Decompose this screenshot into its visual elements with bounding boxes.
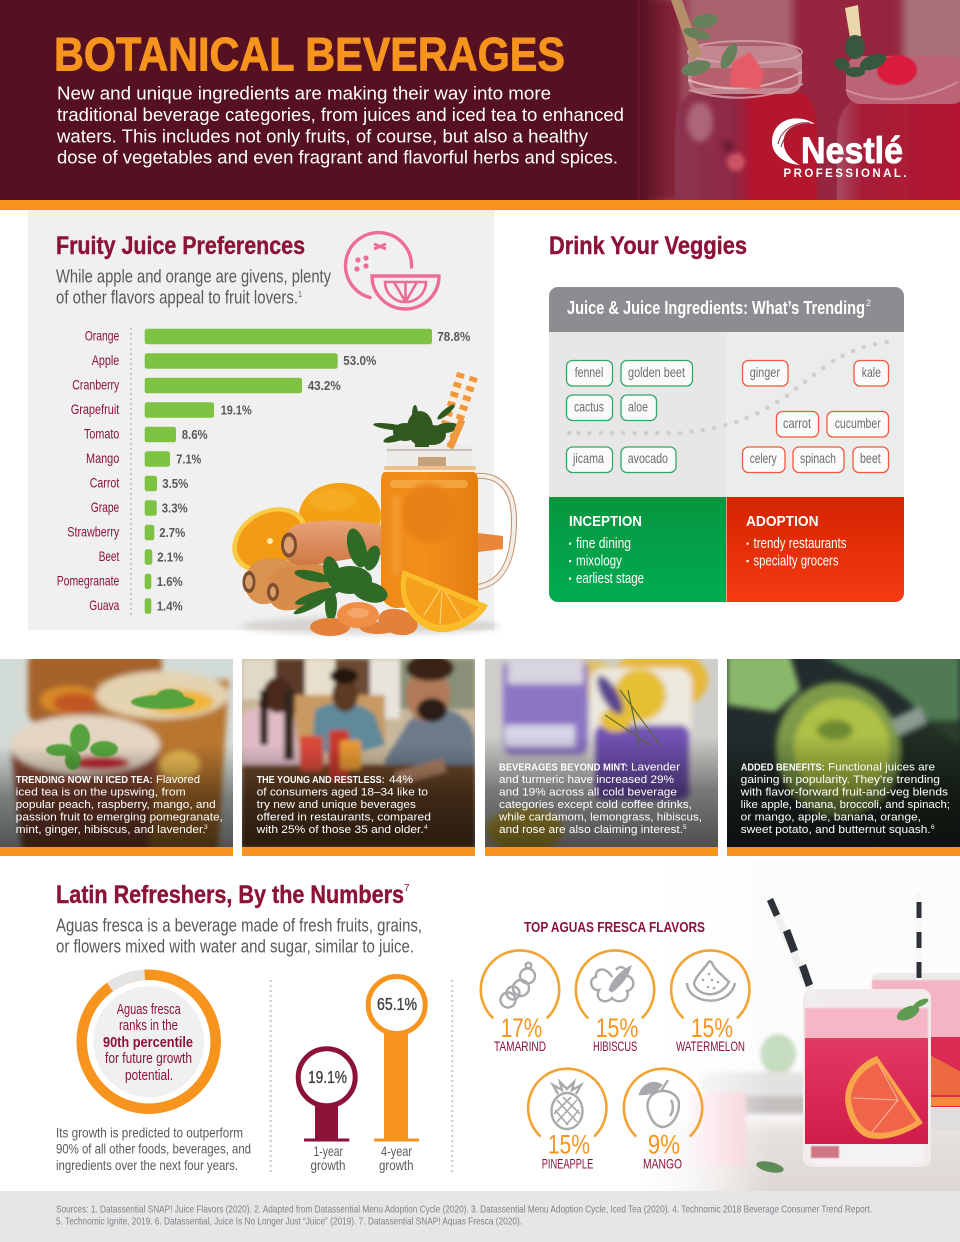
inception box: [549, 497, 726, 602]
photo: lavender drinks: [485, 648, 718, 852]
intro paragraph: traditional beverage categories, from juices and iced tea to enhanced: [57, 105, 624, 125]
lollipop: 1-year growth: [298, 1049, 355, 1173]
adoption tags: beet: [860, 450, 881, 466]
caption: added benefits: [740, 762, 950, 836]
caption: added benefits: gaining in popularity. They’re trending: [741, 774, 940, 786]
header photo: red drinks in jars: [640, 0, 960, 210]
caption: beverages beyond mint: and rose are also claiming interest.: [499, 824, 683, 836]
caption: young and restless: try new and unique beverages: [257, 799, 417, 811]
bar chart: Strawberry: [67, 524, 119, 540]
carrot slices: [310, 618, 350, 636]
orange band: [0, 847, 233, 856]
bar chart: Pomegranate: [57, 572, 119, 588]
caption: iced tea: passion fruit to emerging pomegranate,: [16, 812, 223, 824]
description: [56, 266, 332, 308]
bar chart: Beet: [99, 548, 119, 564]
flavor: pineapple: PINEAPPLE: [542, 1156, 593, 1172]
90th percentile ring: for future growth: [105, 1050, 192, 1067]
bar chart: 1.4%: [157, 600, 183, 614]
icon: pineapple: [552, 1082, 582, 1129]
caption: added benefits: or mango, apple, banana, orange,: [741, 812, 921, 824]
jar juice: [381, 472, 478, 608]
growth note: 90% of all other foods, beverages, and: [56, 1140, 251, 1156]
caption: young and restless: [256, 774, 431, 836]
bar chart: Carrot: [90, 474, 119, 490]
caption: young and restless: 4: [424, 824, 428, 831]
lollipop: 4-year growth: 4-year: [381, 1143, 412, 1159]
caption: young and restless: offered in restaurants, compared: [257, 812, 431, 824]
bar chart: [57, 328, 470, 616]
parsley on jar: [373, 403, 460, 447]
flavor: hibiscus: 15%: [596, 1013, 638, 1043]
orange band: [727, 847, 960, 856]
caption: iced tea: [16, 774, 223, 836]
description: While apple and orange are givens, plenty: [56, 266, 332, 286]
bar chart: Mango: [86, 450, 119, 466]
intro paragraph: waters. This includes not only fruits, of course, but also a healthy: [56, 126, 588, 146]
flavor: mango: [624, 1069, 702, 1172]
heading: latin refreshers: 7: [404, 883, 410, 894]
caption: beverages beyond mint: 5: [683, 824, 687, 831]
front straw: [766, 897, 814, 990]
bar chart: Grape: [91, 499, 119, 515]
back orange: [299, 483, 381, 525]
flavor: hibiscus: HIBISCUS: [593, 1038, 637, 1054]
inception tags: avocado: [628, 450, 668, 466]
parsley front: [292, 526, 390, 621]
description: [56, 914, 422, 956]
icon: tamarind: [500, 963, 535, 1008]
bar chart: Tomato: [84, 426, 119, 442]
logo: Nestlé Professional: [772, 118, 906, 180]
bar chart: 53.0%: [343, 354, 376, 368]
panel heading: 2: [866, 298, 871, 308]
inception tags: golden beet: [628, 364, 685, 380]
bar chart: 19.1%: [221, 404, 252, 418]
adoption tags: kale: [862, 364, 881, 380]
caption: added benefits: sweet potato, and butternut squash.: [741, 824, 931, 836]
flavor: tamarind: TAMARIND: [494, 1038, 546, 1054]
adoption tags: ginger: [750, 364, 780, 380]
inception tags: jicama: [572, 450, 604, 466]
flavor: mango: 9%: [648, 1130, 680, 1160]
flavor: watermelon: [671, 950, 750, 1054]
90th percentile ring: potential.: [125, 1067, 173, 1084]
lollipop: 1-year growth: 19.1%: [308, 1067, 347, 1087]
caption: young and restless: with 25% of those 35 and older.: [256, 824, 424, 836]
inception box: INCEPTION: [569, 513, 642, 530]
bar chart: 7.1%: [176, 452, 201, 466]
front straw tip: [450, 420, 462, 448]
icon: citrus fruit: [346, 233, 439, 309]
90th percentile ring: [82, 975, 216, 1109]
description: or flowers mixed with water and sugar, similar to juice.: [56, 936, 414, 956]
adoption box: trendy restaurants: [754, 536, 846, 552]
adoption box: specialty grocers: [754, 554, 838, 570]
panel heading: Juice & Juice Ingredients: What’s Trending: [567, 298, 865, 318]
heading: drink your veggies: Drink Your Veggies: [549, 232, 747, 260]
caption: beverages beyond mint: Lavender: [631, 762, 680, 774]
lollipop: 1-year growth: 1-year: [314, 1143, 343, 1159]
caption: iced tea: iced tea is on the upswing, from: [16, 786, 186, 798]
card: young and restless: [242, 655, 475, 856]
bar chart: 8.6%: [182, 428, 208, 442]
lollipop: 4-year growth: growth: [379, 1157, 414, 1173]
caption: iced tea: TRENDING NOW IN ICED TEA:: [16, 775, 153, 786]
bar chart: 3.5%: [162, 477, 188, 491]
flavor: pineapple: 15%: [548, 1130, 590, 1160]
front glass: [803, 989, 931, 1167]
right jar: [837, 100, 960, 205]
bar chart: Guava: [89, 597, 119, 613]
card: added benefits: [727, 655, 960, 856]
caption: beverages beyond mint: and turmeric have increased 29%: [499, 774, 674, 786]
caption: iced tea: Flavored: [156, 774, 200, 786]
caption: added benefits: 6: [931, 824, 935, 831]
adoption tags: cucumber: [835, 415, 881, 431]
flavor: tamarind: 17%: [501, 1013, 542, 1043]
lollipop: 4-year growth: 65.1%: [377, 994, 417, 1014]
flavor: mango: MANGO: [643, 1156, 682, 1172]
footer: sources: 5. Technomic Ignite, 2019. 6. Datassential, Juice Is No Longer Just “Juice” (2019). 7. Datassential SNAP! Aquas Fresca (2020).: [56, 1216, 522, 1228]
orange wedge: [401, 570, 488, 632]
footer: sources: [0, 1191, 960, 1242]
bar chart: 2.1%: [157, 550, 183, 564]
adoption box: [726, 497, 904, 602]
flavor: pineapple: [528, 1069, 606, 1172]
caption: beverages beyond mint: and 19% across all cold beverage: [499, 786, 677, 798]
back glass: [872, 973, 960, 1130]
flavor: watermelon: WATERMELON: [676, 1038, 745, 1054]
heading: fruity juice: Fruity Juice Preferences: [56, 232, 305, 260]
growth note: Its growth is predicted to outperform: [56, 1124, 243, 1140]
intro paragraph: dose of vegetables and even fragrant and flavorful herbs and spices.: [57, 148, 618, 168]
caption: added benefits: with flavor-forward fruit-and-veg blends: [740, 786, 949, 798]
caption: added benefits: ADDED BENEFITS:: [741, 762, 825, 774]
adoption tags: carrot: [783, 415, 811, 431]
jar neck: [387, 445, 472, 467]
heading: top flavors: TOP AGUAS FRESCA FLAVORS: [524, 920, 705, 936]
card: beverages beyond mint: [485, 648, 718, 856]
lollipop: 1-year growth: growth: [310, 1157, 346, 1173]
orange band: [485, 847, 718, 856]
photo: juice jar with oranges and carrots: [220, 373, 520, 640]
description: Aguas fresca is a beverage made of fresh fruits, grains,: [56, 914, 422, 936]
bar chart: 3.3%: [162, 502, 188, 516]
adoption tags: spinach: [800, 450, 836, 466]
inception box: mixology: [576, 554, 623, 570]
logo: Nestlé Professional: Nestlé: [801, 130, 903, 171]
growth note: [56, 1124, 251, 1173]
flavor: watermelon: 15%: [691, 1013, 733, 1043]
caption: iced tea: mint, ginger, hibiscus, and lavender.: [16, 824, 206, 836]
caption: young and restless: of consumers aged 18–34 like to: [257, 786, 428, 798]
photo: iced tea: [0, 650, 233, 850]
straws and mint: [671, 0, 702, 60]
orange band: [0, 200, 960, 210]
inception tags: [566, 360, 692, 472]
intro paragraph: New and unique ingredients are making their way into more: [57, 84, 551, 104]
caption: beverages beyond mint: [498, 762, 702, 836]
description: 1: [298, 290, 302, 299]
inception box: earliest stage: [576, 571, 644, 587]
caption: added benefits: like apple, banana, broccoli, and spinach;: [741, 799, 950, 811]
orange band: [242, 847, 475, 856]
bar chart: 2.7%: [159, 526, 185, 540]
flavor: hibiscus: [576, 950, 654, 1054]
adoption tags: [742, 360, 888, 472]
caption: iced tea: popular peach, raspberry, mango, and: [16, 799, 216, 811]
straws: [444, 373, 474, 448]
bar chart: 78.8%: [437, 330, 470, 344]
logo: Nestlé Professional: PROFESSIONAL.: [784, 168, 906, 180]
half orange: [232, 507, 306, 570]
caption: beverages beyond mint: BEVERAGES BEYOND MINT:: [499, 762, 628, 774]
flavor: tamarind: [481, 950, 559, 1054]
lollipop: 4-year growth: [368, 976, 425, 1173]
inception tags: aloe: [628, 398, 648, 414]
caption: beverages beyond mint: while cardamom, lemongrass, hibiscus,: [498, 812, 702, 824]
intro paragraph: [56, 84, 624, 168]
inception box: fine dining: [576, 536, 631, 552]
adoption box: ADOPTION: [746, 513, 818, 530]
card: iced tea: [0, 650, 233, 856]
icon: watermelon: [687, 962, 735, 1001]
photo: green juice: [727, 655, 960, 847]
bar chart: 1.6%: [157, 575, 183, 589]
caption: young and restless: THE YOUNG AND RESTLESS:: [257, 775, 385, 786]
caption: beverages beyond mint: categories except cold coffee drinks,: [499, 799, 692, 811]
icon: mango: [640, 1080, 679, 1127]
left jar: [675, 92, 817, 205]
90th percentile ring: ranks in the: [119, 1017, 178, 1034]
bar chart: Cranberry: [72, 376, 119, 392]
back straw: [916, 902, 922, 980]
caption: young and restless: 44%: [389, 774, 413, 786]
caption: iced tea: 3: [204, 824, 208, 831]
panel: what's trending: [549, 287, 904, 602]
photo: pink aguas fresca drinks: [683, 897, 960, 1191]
title: BOTANICAL BEVERAGES: [54, 28, 565, 82]
bar chart: 43.2%: [308, 379, 341, 393]
description: of other flavors appeal to fruit lovers.: [56, 286, 298, 308]
90th percentile ring: 90th percentile: [103, 1035, 193, 1051]
inception tags: fennel: [575, 364, 603, 380]
caption: added benefits: Functional juices are: [828, 762, 935, 774]
icon: hibiscus: [591, 966, 633, 1001]
photo: friends toasting: [242, 655, 475, 847]
bar chart: Apple: [92, 352, 119, 368]
header banner: [0, 0, 960, 210]
inception tags: cactus: [574, 398, 604, 414]
90th percentile ring: Aguas fresca: [117, 1001, 181, 1018]
jar handle: [476, 476, 514, 587]
adoption tags: celery: [750, 450, 777, 466]
bar chart: Orange: [85, 328, 119, 344]
bar chart: Grapefruit: [71, 401, 119, 417]
carrots: [283, 520, 381, 566]
heading: latin refreshers: Latin Refreshers, By the Numbers: [56, 881, 404, 909]
growth note: ingredients over the next four years.: [56, 1157, 238, 1173]
adoption curve dots: [567, 340, 889, 436]
